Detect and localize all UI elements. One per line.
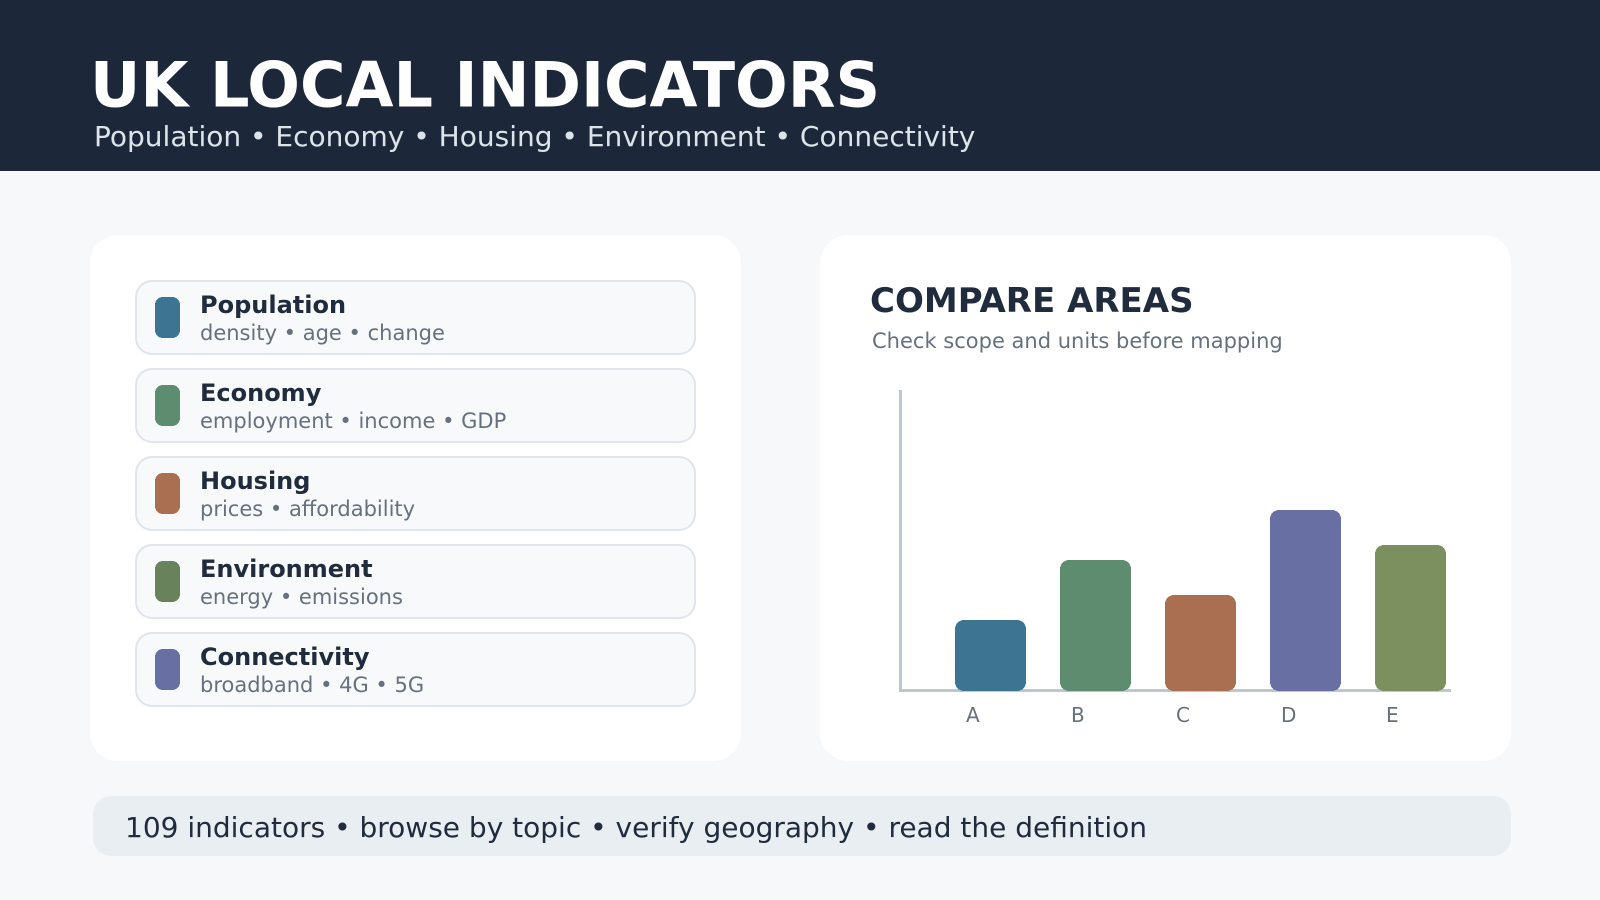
panel: indicator topics (90, 235, 741, 761)
row: Population: density • age • change (200, 321, 445, 345)
axis labels: D (1281, 703, 1296, 727)
bar chart (899, 390, 1451, 727)
axis labels: E (1386, 703, 1399, 727)
row: Environment (136, 545, 695, 618)
axis labels: B (1071, 703, 1085, 727)
bar B (1060, 560, 1131, 691)
bar C (1165, 595, 1236, 691)
row: Economy: employment • income • GDP (200, 409, 506, 433)
row: Connectivity (136, 633, 695, 706)
panel subheading: Check scope and units before mapping (872, 329, 1283, 353)
row: Connectivity: broadband • 4G • 5G (200, 673, 424, 697)
subtitle: Population • Economy • Housing • Environment • Connectivity (94, 120, 975, 153)
panel heading: COMPARE AREAS (870, 281, 1194, 321)
header band (0, 0, 1600, 171)
row: Population (136, 281, 695, 354)
axis labels: C (1176, 703, 1190, 727)
footer bar (93, 796, 1511, 856)
row: Housing (136, 457, 695, 530)
panel: compare areas (820, 235, 1511, 761)
row: Environment: energy • emissions (200, 585, 403, 609)
footer text: 109 indicators • browse by topic • verify geography • read the definition (125, 811, 1147, 844)
title: UK LOCAL INDICATORS (90, 49, 880, 122)
row: Population: Population (200, 291, 346, 319)
axis labels: A (966, 703, 980, 727)
row: Environment: Environment (200, 555, 373, 583)
row: Connectivity: Connectivity (200, 643, 370, 671)
row: Economy (136, 369, 695, 442)
axis labels (966, 703, 1399, 727)
row: Housing: prices • affordability (200, 497, 415, 521)
bar E (1375, 545, 1446, 691)
bar D (1270, 510, 1341, 691)
bar A (955, 620, 1026, 691)
row: Economy: Economy (200, 379, 322, 407)
row: Housing: Housing (200, 467, 310, 495)
